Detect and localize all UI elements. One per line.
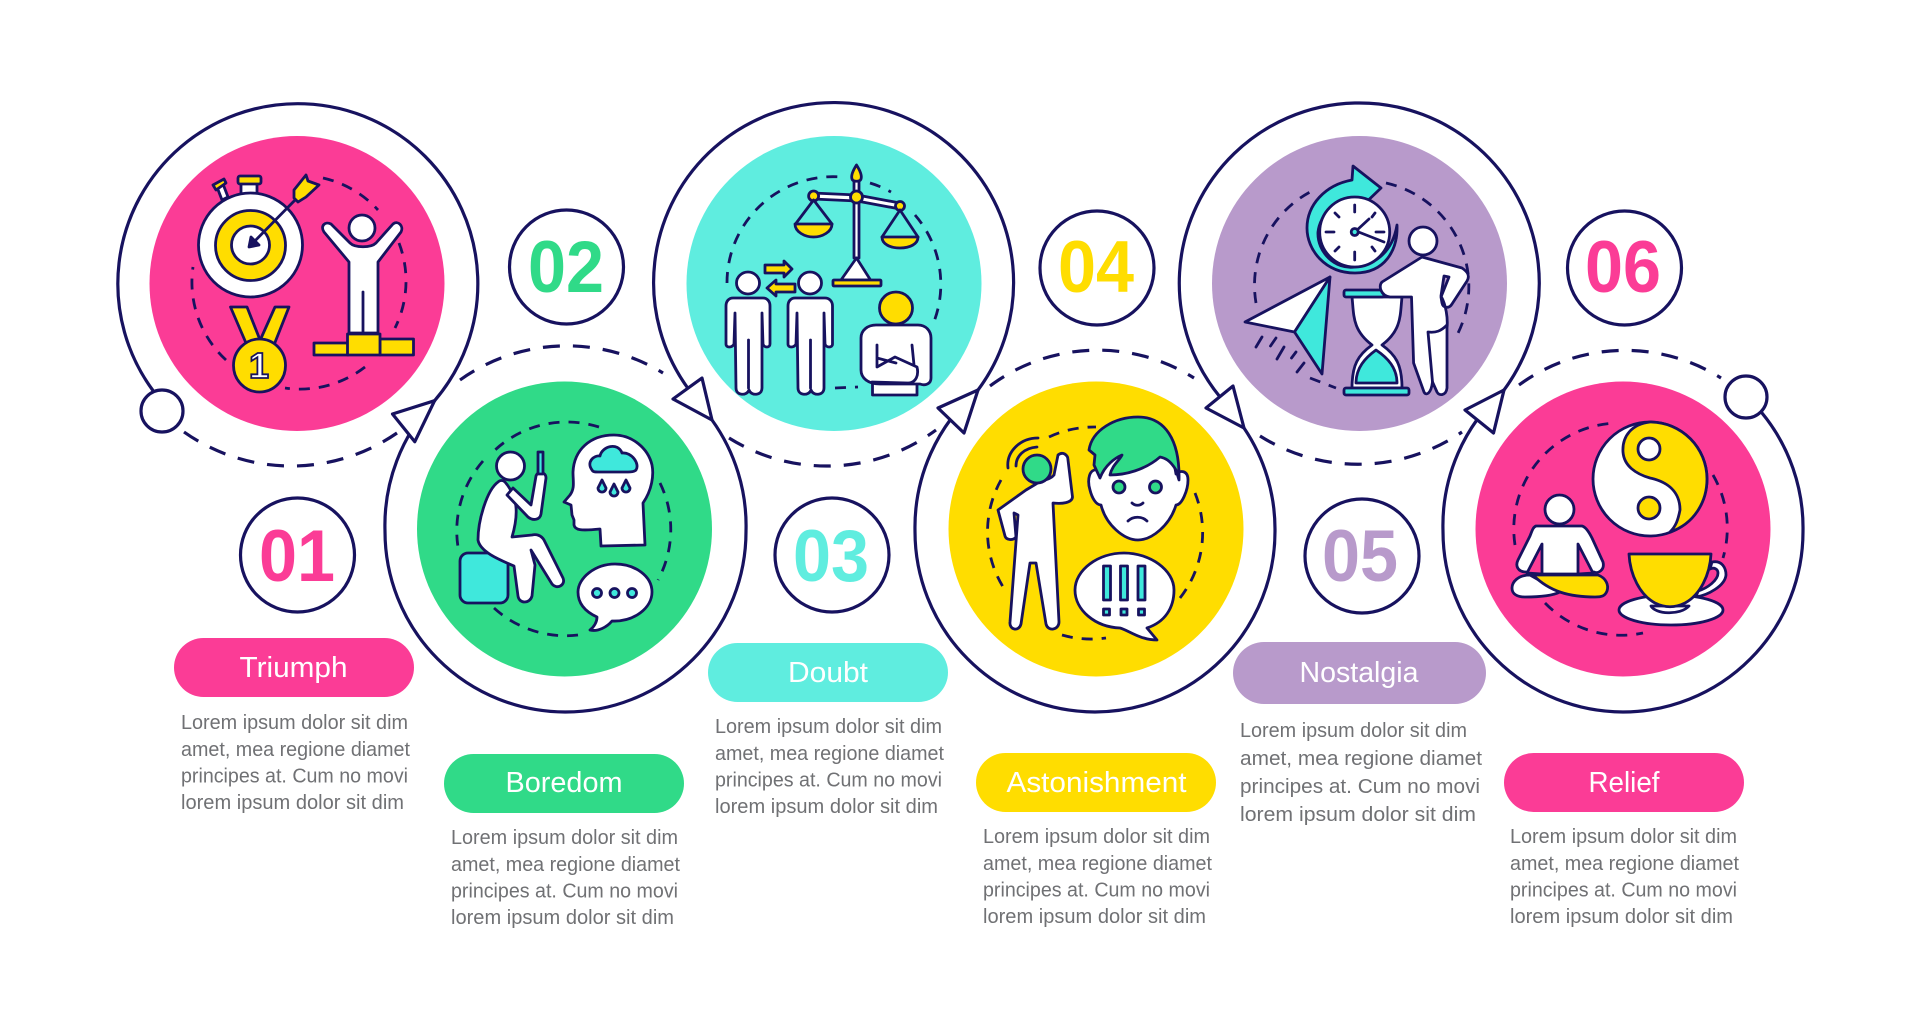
icon: doubt — [726, 165, 941, 395]
end marker — [1725, 376, 1767, 418]
text block: Relief: amet, mea regione diamet — [1510, 853, 1739, 875]
label: Relief — [1504, 753, 1744, 812]
start marker — [141, 390, 183, 432]
text block: Astonishment: lorem ipsum dolor sit dim — [983, 906, 1206, 928]
text block: Triumph: lorem ipsum dolor sit dim — [181, 792, 404, 814]
text block: Astonishment: principes at. Cum no movi — [983, 880, 1210, 902]
text block: Boredom: amet, mea regione diamet — [451, 854, 680, 876]
text block: Relief: principes at. Cum no movi — [1510, 880, 1737, 902]
process path: solid and dashed rings — [118, 103, 1803, 712]
label: Doubt — [708, 643, 948, 702]
text block: Relief: lorem ipsum dolor sit dim — [1510, 906, 1733, 928]
icon: astonishment — [988, 417, 1203, 640]
text block: Doubt: Lorem ipsum dolor sit dim — [715, 716, 942, 738]
text block: Doubt — [715, 716, 944, 818]
text block: Nostalgia: lorem ipsum dolor sit dim — [1240, 804, 1476, 826]
text block: Nostalgia: Lorem ipsum dolor sit dim — [1240, 720, 1467, 742]
number 03 — [775, 498, 889, 612]
label: Triumph — [174, 638, 414, 697]
number 03: 03 — [793, 516, 869, 597]
arrowheads — [392, 378, 1504, 442]
label: Doubt: Doubt — [788, 657, 868, 689]
number 04 — [1040, 211, 1154, 325]
colour discs — [150, 136, 1770, 676]
text block: Triumph: principes at. Cum no movi — [181, 766, 408, 788]
label: Astonishment: Astonishment — [1006, 767, 1186, 799]
text block: Triumph: Lorem ipsum dolor sit dim — [181, 712, 408, 734]
text block: Boredom: principes at. Cum no movi — [451, 880, 678, 902]
text block: Boredom: lorem ipsum dolor sit dim — [451, 907, 674, 929]
label: Astonishment — [976, 753, 1216, 812]
text block: Relief: Lorem ipsum dolor sit dim — [1510, 826, 1737, 848]
text block: Triumph — [181, 712, 410, 814]
number 05 — [1305, 499, 1419, 613]
label: Relief: Relief — [1588, 767, 1660, 799]
text block: Relief — [1510, 826, 1739, 928]
label: Boredom: Boredom — [506, 767, 622, 799]
number 02: 02 — [528, 227, 604, 308]
text block: Nostalgia: amet, mea regione diamet — [1240, 748, 1482, 770]
icon: triumph — [192, 175, 414, 392]
text block: Doubt: amet, mea regione diamet — [715, 743, 944, 765]
icon: boredom — [457, 422, 671, 636]
label: Triumph: Triumph — [240, 652, 348, 684]
number 01 — [240, 498, 354, 612]
text block: Boredom: Lorem ipsum dolor sit dim — [451, 827, 678, 849]
text block: Doubt: principes at. Cum no movi — [715, 770, 942, 792]
number 06: 06 — [1585, 227, 1661, 308]
number 04: 04 — [1058, 227, 1134, 308]
label: Nostalgia: Nostalgia — [1300, 657, 1419, 689]
text block: Astonishment — [983, 826, 1212, 928]
text block: Nostalgia — [1240, 720, 1482, 826]
text block: Triumph: amet, mea regione diamet — [181, 739, 410, 761]
text block: Boredom — [451, 827, 680, 929]
icon: nostalgia — [1245, 166, 1469, 395]
text block: Doubt: lorem ipsum dolor sit dim — [715, 796, 938, 818]
text block: Nostalgia: principes at. Cum no movi — [1240, 776, 1480, 798]
icon: relief — [1512, 422, 1727, 635]
label: Boredom — [444, 754, 684, 813]
number 05: 05 — [1322, 516, 1398, 597]
text block: Astonishment: Lorem ipsum dolor sit dim — [983, 826, 1210, 848]
number 01: 01 — [259, 516, 335, 597]
text block: Astonishment: amet, mea regione diamet — [983, 853, 1212, 875]
icon: triumph: 1 — [249, 345, 269, 386]
label: Nostalgia — [1233, 642, 1486, 704]
number 06 — [1568, 211, 1682, 325]
number 02 — [510, 210, 624, 324]
